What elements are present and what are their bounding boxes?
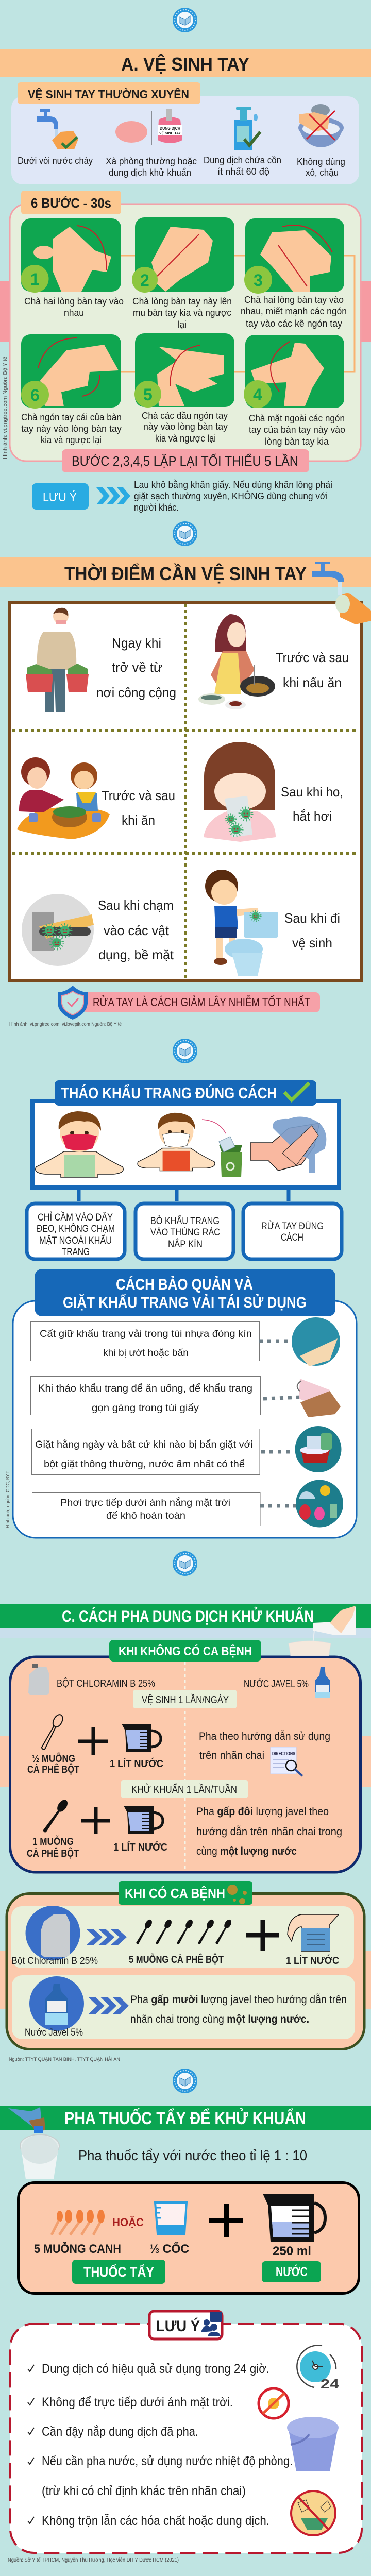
text: javel directions [199, 1731, 330, 1776]
cell: ăn: Trước và sau [102, 788, 175, 803]
panel: khi không có ca bệnh: NƯỚC JAVEL 5% [244, 1678, 309, 1690]
icon: viruses [227, 1885, 247, 1904]
label: dung dịch khử khuẩn [109, 167, 191, 178]
cell: từ nơi công cộng: trở về từ [112, 659, 162, 675]
illustration: child removing mask [138, 1113, 215, 1171]
cell: từ nơi công cộng [26, 608, 176, 712]
panel: khi không có ca bệnh: BỘT CHLORAMIN B 25% [57, 1677, 155, 1689]
button: NƯỚC [276, 2264, 308, 2279]
cell: nấu ăn [198, 614, 349, 709]
cell: đi vệ sinh: Sau khi đi [284, 910, 340, 926]
step 6 [21, 334, 122, 445]
step 1: nhau [64, 308, 84, 318]
note: lưu ý lau khô: người khác. [134, 502, 179, 513]
cell: từ nơi công cộng: Ngay khi [112, 635, 161, 651]
heading: thời điểm cần vệ sinh tay: THỜI ĐIỂM CẦN VỆ SINH TAY [64, 563, 307, 584]
cell: ho hắt hơi: Sau khi ho, [281, 784, 343, 800]
row 4 [32, 1480, 343, 1527]
panel: six moments [9, 602, 362, 981]
icon: directions sheet: DIRECTIONS [272, 1751, 295, 1757]
row 4: Phơi trực tiếp dưới ánh nắng mặt trời [60, 1497, 230, 1509]
step 1: 1 [30, 270, 40, 289]
recipe: chloramin 1 spoon: CÀ PHÊ BỘT [27, 1847, 79, 1859]
box: RỬA TAY ĐÚNG [261, 1221, 324, 1232]
heading: A. Vệ sinh tay [0, 49, 371, 77]
list [28, 2362, 293, 2528]
heading: thời điểm cần vệ sinh tay [0, 557, 371, 587]
heading: A. Vệ sinh tay: A. VỆ SINH TAY [121, 53, 249, 75]
icon: javel bottle [315, 1667, 330, 1698]
backing bands [0, 1628, 371, 2009]
step 2: 2 [140, 271, 149, 290]
icon: recycling bin [219, 1137, 242, 1177]
text: tỉ lệ: Pha thuốc tẩy với nước theo tỉ lệ 1 : 10 [78, 2147, 307, 2163]
label: ít nhất 60 độ [217, 166, 269, 177]
logo [173, 521, 197, 546]
label [106, 156, 197, 178]
icon: faucet and hands [37, 109, 78, 149]
box: VÀO THÙNG RÁC [150, 1227, 220, 1238]
step 5: này vào lòng bàn tay [143, 421, 228, 432]
recipe: chloramin ½ spoon: 1 LÍT NƯỚC [110, 1757, 163, 1770]
cell: chạm vật dụng: vào các vật [104, 923, 170, 938]
text: javel double [196, 1806, 342, 1857]
row 2: Khi tháo khẩu trang để ăn uống, để khẩu trang [38, 1383, 252, 1394]
icon: five spoons [134, 1919, 233, 1945]
step 3: Chà hai lòng bàn tay vào [244, 295, 344, 305]
panel: cách bảo quản và giặt khẩu trang [13, 1269, 357, 1538]
credit: Hình ảnh: vi.pngtree.com; vi.lovepik.com Nguồn: Bộ Y tế [9, 1021, 122, 1027]
step 6: tay này vào lòng bàn tay [21, 423, 122, 434]
text: javel double: cùng một lượng nước [196, 1845, 297, 1857]
arrow [202, 1120, 226, 1133]
icon: beaker [288, 1914, 339, 1951]
box: ĐEO, KHÔNG CHẠM [37, 1223, 115, 1234]
credit: Nguồn: TTYT QUẬN TÂN BÌNH, TTYT QUẬN HẢI AN [9, 2056, 120, 2062]
box: TRANG [62, 1247, 90, 1258]
pill [121, 1780, 248, 1798]
step 6: 6 [30, 386, 40, 404]
icon: chloramin container [28, 1664, 49, 1695]
row 2: gọn gàng trong túi giấy [92, 1403, 199, 1414]
box [27, 1204, 125, 1259]
step 3 [241, 218, 347, 329]
panel: khi có ca bệnh: KHI CÓ CA BỆNH [125, 1886, 225, 1901]
list: Không để trực tiếp dưới ánh mặt trời. [42, 2395, 233, 2410]
step 6: kia và ngược lại [41, 435, 102, 445]
step 5: kia và ngược lại [155, 433, 216, 444]
step 5: 5 [143, 385, 153, 404]
icon: basin crossed out [298, 104, 344, 147]
icon: 24h clock: 24 [321, 2376, 340, 2392]
recipe: chloramin ½ spoon: ½ MUỖNG [32, 1752, 75, 1765]
panel: lưu ý [10, 2311, 362, 2553]
cell: ăn [17, 757, 175, 839]
panel: khi không có ca bệnh [10, 1606, 361, 1872]
icon: soap and sanitizer bottle: VỆ SINH TAY [159, 131, 181, 135]
row 1: Cất giữ khẩu trang vải trong túi nhựa đóng kín [40, 1329, 252, 1340]
row 3: bột giặt thông thường, nước ấm nhất có thể [44, 1459, 245, 1470]
step 2: mu bàn tay kia và ngược [133, 308, 231, 318]
cell: ho hắt hơi [204, 742, 343, 842]
recipe: chloramin 1 spoon: 1 LÍT NƯỚC [113, 1841, 167, 1853]
cell: từ nơi công cộng: nơi công cộng [96, 685, 176, 700]
step 3: 3 [254, 271, 263, 290]
step 3: tay vào các kẽ ngón tay [246, 318, 342, 329]
panel: 6 bước: 6 BƯỚC - 30s [31, 195, 111, 211]
icon: soap and sanitizer bottle: DUNG DỊCH [160, 126, 180, 131]
heading: C. cách pha dung dịch khử khuẩn: C. CÁCH PHA DUNG DỊCH KHỬ KHUẨN [62, 1607, 314, 1625]
row 2 [31, 1377, 341, 1417]
logo [173, 1551, 197, 1576]
illustration: pouring bottle into cup [289, 1606, 356, 1656]
panel: lưu ý: LƯU Ý [156, 2317, 200, 2335]
panel: vệ sinh tay thường xuyên [11, 82, 359, 184]
row 4: để khô hoàn toàn [106, 1511, 185, 1521]
pill: VỆ SINH 1 LẦN/NGÀY [142, 1694, 229, 1706]
label: Xà phòng thường hoặc [106, 156, 197, 166]
step 1: Chà hai lòng bàn tay vào [24, 296, 124, 307]
box: CHỈ CẦM VÀO DÂY [38, 1212, 113, 1223]
icon: directions sheet [271, 1747, 302, 1776]
panel: thuốc tẩy + nước: 5 MUỖNG CANH [34, 2241, 121, 2256]
row: chloramin: 5 MUỖNG CÀ PHÊ BỘT [129, 1953, 224, 1965]
panel: tháo khẩu trang đúng cách: THÁO KHẨU TRANG ĐÚNG CÁCH [61, 1083, 277, 1102]
box: NẮP KÍN [168, 1239, 203, 1250]
step 4: Chà mặt ngoài các ngón [249, 413, 345, 423]
row: chloramin: 1 LÍT NƯỚC [286, 1954, 339, 1967]
panel: 6 bước [10, 191, 361, 461]
list: Không trộn lẫn các hóa chất hoặc dung dịch. [42, 2513, 269, 2528]
recipe: chloramin ½ spoon: CÀ PHÊ BỘT [27, 1763, 79, 1775]
row: chloramin: Bột Chloramin B 25% [11, 1956, 98, 1967]
icon: cup [155, 2202, 187, 2234]
callout: rửa tay: RỬA TAY LÀ CÁCH GIẢM LÂY NHIỄM TỐT NHẤT [93, 994, 310, 1009]
icon: no sun [259, 2388, 289, 2418]
cell: nấu ăn: khi nấu ăn [283, 675, 342, 690]
list: Dung dịch có hiệu quả sử dụng trong 24 giờ. [42, 2362, 269, 2376]
heading: pha thuốc tẩy: PHA THUỐC TẨY ĐỂ KHỬ KHUẨN [64, 2108, 306, 2128]
icon: faucet with soapy hand [312, 562, 371, 624]
row: javel [12, 1975, 355, 2039]
text: javel double: hướng dẫn trên nhãn chai trong [196, 1826, 342, 1838]
step 4: tay của bàn tay này vào [249, 425, 345, 435]
heading: C. cách pha dung dịch khử khuẩn [0, 1604, 371, 1628]
note: lưu ý lau khô: Lau khô bằng khăn giấy. Nếu dùng khăn lông phải [134, 479, 332, 490]
panel: cách bảo quản và giặt khẩu trang: GIẶT KHẨU TRANG VẢI TÁI SỬ DỤNG [63, 1294, 307, 1311]
icon: 24h clock [297, 2345, 340, 2392]
cell: chạm vật dụng: dụng, bề mặt [98, 947, 174, 962]
row: javel: Nước Javel 5% [25, 2027, 83, 2038]
button [262, 2261, 321, 2282]
illustration: child holding mask straps [36, 1111, 123, 1177]
step 5 [134, 333, 234, 444]
text: javel directions: trên nhãn chai [199, 1750, 264, 1761]
step 2: Chà lòng bàn tay này lên [132, 296, 232, 307]
row: javel: Pha gấp mười lượng javel theo hướng dẫn trên [130, 1994, 347, 2006]
step 4: lòng bàn tay kia [265, 436, 329, 447]
cell: ăn: khi ăn [122, 812, 155, 828]
icon: bucket with lid [287, 2417, 339, 2471]
icon: shield [58, 986, 88, 1020]
heading: pha thuốc tẩy [0, 2106, 371, 2130]
icon: measuring mug [263, 2194, 325, 2242]
text: javel directions: Pha theo hướng dẫn sử dụng [199, 1731, 330, 1742]
panel: khi không có ca bệnh: KHI KHÔNG CÓ CA BỆNH [119, 1644, 252, 1658]
panel: tháo khẩu trang đúng cách [27, 1080, 342, 1259]
side credit: Hình ảnh, nguồn: CDC, BYT [5, 1471, 10, 1528]
label: Dưới vòi nước chảy [18, 156, 93, 166]
row: javel: nhãn chai trong cùng một lượng nước. [130, 2013, 309, 2025]
side credit: Hình ảnh: vi.pngtree.com Nguồn: Bộ Y tế [2, 357, 8, 459]
box: MẶT NGOÀI KHẨU [39, 1235, 112, 1246]
list: Nếu cần pha nước, sử dụng nước nhiệt độ phòng. [42, 2454, 293, 2468]
cell: nấu ăn: Trước và sau [276, 650, 349, 665]
illustration: washing hands [250, 1117, 326, 1173]
list: (trừ khi có chỉ định khác trên nhãn chai) [42, 2484, 246, 2498]
icon: bleach bottle pouring [8, 2107, 45, 2133]
row: chloramin [11, 1906, 354, 1968]
note: lưu ý lau khô: LƯU Ý [43, 490, 77, 504]
button [72, 2260, 165, 2284]
logo [173, 8, 197, 32]
step 4 [244, 335, 345, 447]
panel: vệ sinh tay thường xuyên: VỆ SINH TAY THƯỜNG XUYÊN [28, 87, 189, 101]
box: BỎ KHẨU TRANG [150, 1215, 220, 1227]
step 2 [132, 217, 234, 330]
icon: alcohol gel bottle [234, 107, 260, 150]
pill [133, 1690, 237, 1708]
step 4: 4 [253, 385, 262, 404]
step 3: nhau, miết mạnh các ngón [241, 306, 347, 316]
logo [173, 2069, 197, 2093]
label [297, 157, 345, 178]
icon: bucket [20, 2134, 59, 2179]
box [136, 1204, 233, 1259]
label: Dung dịch chứa cồn [204, 155, 281, 165]
row 1 [31, 1317, 340, 1366]
icon: no mixing [291, 2491, 335, 2535]
step 6: Chà ngón tay cái của bàn [21, 412, 122, 422]
cell: ho hắt hơi: hắt hơi [293, 808, 332, 824]
box [243, 1204, 342, 1259]
row 1: khi bị ướt hoặc bẩn [103, 1348, 189, 1359]
icon: orange spoons [52, 2210, 105, 2235]
icon: people question [201, 2312, 222, 2336]
recipe: chloramin ½ spoon [27, 1713, 163, 1775]
recipe: chloramin 1 spoon [27, 1798, 167, 1859]
panel: thuốc tẩy + nước: ⅓ CỐC [149, 2242, 189, 2256]
cell: đi vệ sinh: vệ sinh [292, 935, 332, 951]
banner: lặp lại bước: BƯỚC 2,3,4,5 LẶP LẠI TỐI THIỂU 5 LẦN [72, 453, 298, 469]
panel: khi có ca bệnh [7, 1881, 364, 2049]
step 5: Chà các đầu ngón tay [142, 411, 228, 421]
note: lưu ý lau khô [32, 479, 332, 513]
panel: thuốc tẩy + nước: HOẶC [112, 2216, 144, 2229]
logo [173, 1039, 197, 1063]
cell: đi vệ sinh [205, 870, 340, 976]
step 1 [21, 218, 124, 318]
label: Không dùng [297, 157, 345, 167]
icon: soap and sanitizer bottle [115, 109, 182, 145]
panel: cách bảo quản và giặt khẩu trang: CÁCH BẢO QUẢN VÀ [116, 1276, 253, 1293]
note: lưu ý lau khô: giặt sạch thường xuyên, KHÔNG dùng chung với [134, 490, 328, 501]
label [204, 155, 281, 177]
label: xô, chậu [306, 167, 339, 178]
panel: thuốc tẩy + nước [19, 2182, 359, 2294]
row 3 [32, 1426, 341, 1475]
icon: check [284, 1083, 309, 1100]
cell: chạm vật dụng [22, 894, 174, 966]
cell: chạm vật dụng: Sau khi chạm [98, 897, 174, 913]
row 3: Giặt hằng ngày và bất cứ khi nào bị bẩn giặt với [35, 1439, 253, 1450]
recipe: chloramin 1 spoon: 1 MUỖNG [32, 1835, 74, 1848]
list: Cần đậy nắp dung dịch đã pha. [42, 2424, 198, 2439]
panel: thuốc tẩy + nước: 250 ml [273, 2244, 311, 2258]
callout: rửa tay [58, 986, 320, 1020]
pill: KHỬ KHUẨN 1 LẦN/TUẦN [131, 1783, 237, 1795]
button: THUỐC TẨY [83, 2263, 154, 2280]
pink backing band [0, 281, 371, 342]
text: javel double: Pha gấp đôi lượng javel theo [196, 1806, 329, 1818]
step 2: lại [178, 319, 187, 330]
credit: Nguồn: Sở Y tế TPHCM, Nguyễn Thu Hương, Học viên ĐH Y Dược HCM (2021) [8, 2556, 179, 2563]
banner: lặp lại bước [62, 449, 309, 472]
box: CÁCH [281, 1232, 303, 1243]
